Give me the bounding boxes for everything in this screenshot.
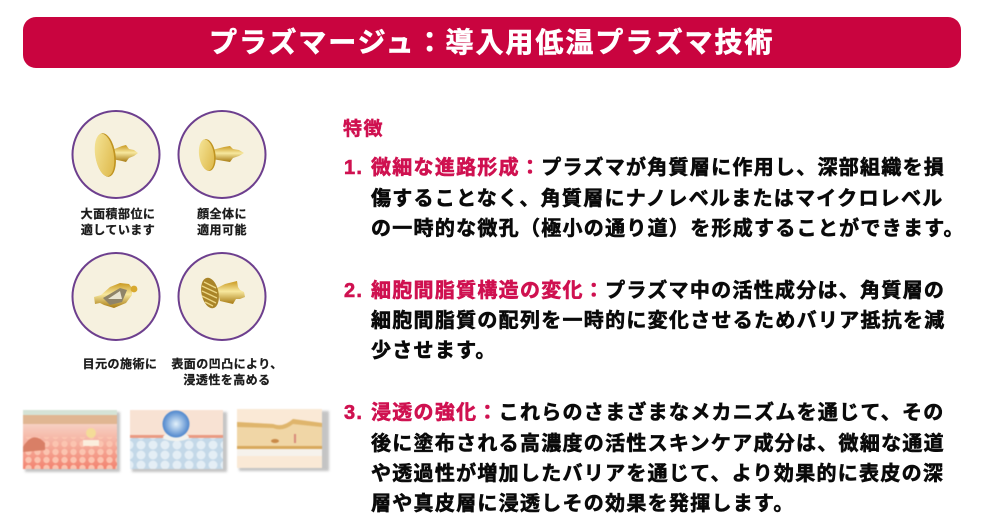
feature 1: 傷することなく、角質層にナノレベルまたはマイクロレベル xyxy=(371,188,944,210)
caption: 浸透性を高める xyxy=(183,372,271,386)
diagram: skin layer 1 xyxy=(23,410,120,472)
icon: eye-area tip xyxy=(72,253,160,340)
feature 3: 浸透の強化：これらのさまざまなメカニズムを通じて、その xyxy=(371,402,945,424)
heading: features: 特徴 xyxy=(343,119,384,140)
caption: 目元の施術に xyxy=(83,357,157,371)
caption xyxy=(171,357,283,386)
feature 2 xyxy=(344,279,946,362)
feature 1: 微細な進路形成：プラズマが角質層に作用し、深部組織を損 xyxy=(371,157,945,179)
feature 3: 層や真皮層に浸透しその効果を発揮します。 xyxy=(371,493,795,515)
feature 2: 細胞間脂質構造の変化：プラズマ中の活性成分は、角質層の xyxy=(371,280,945,302)
caption xyxy=(197,207,247,236)
feature 3: や透過性が増加したバリアを通じて、より効果的に表皮の深 xyxy=(371,463,944,485)
caption: 顔全体に xyxy=(197,207,247,221)
features text panel xyxy=(343,118,965,515)
caption: 大面積部位に xyxy=(81,207,155,221)
feature 3: 3. xyxy=(344,402,363,424)
caption xyxy=(80,207,155,236)
caption: 適しています xyxy=(81,222,155,236)
feature 2: 細胞間脂質の配列を一時的に変化させるためバリア抵抗を減 xyxy=(371,310,946,332)
icon: large-area tip xyxy=(72,111,160,198)
caption: 表面の凹凸により、 xyxy=(171,357,283,371)
title banner xyxy=(23,17,961,68)
tip icons xyxy=(72,110,266,341)
title: プラズマージュ：導入用低温プラズマ技術 xyxy=(209,27,774,58)
feature 1: 1. xyxy=(344,157,363,179)
skin diagrams xyxy=(22,408,330,474)
caption: 適用可能 xyxy=(197,222,247,236)
icon: textured tip xyxy=(178,253,266,340)
feature 3: 後に塗布される高濃度の活性スキンケア成分は、微細な通道 xyxy=(371,433,945,455)
icon: full-face tip xyxy=(178,111,266,198)
diagram: skin layer 3 xyxy=(237,409,329,471)
feature 1: の一時的な微孔（極小の通り道）を形成することができます。 xyxy=(371,218,965,240)
tip icons and captions xyxy=(72,110,283,386)
feature 1 xyxy=(344,156,965,240)
feature 2: 少させます。 xyxy=(371,340,497,362)
feature 3 xyxy=(344,401,945,515)
diagram: skin layer 2 xyxy=(130,410,227,472)
feature 2: 2. xyxy=(344,280,363,302)
